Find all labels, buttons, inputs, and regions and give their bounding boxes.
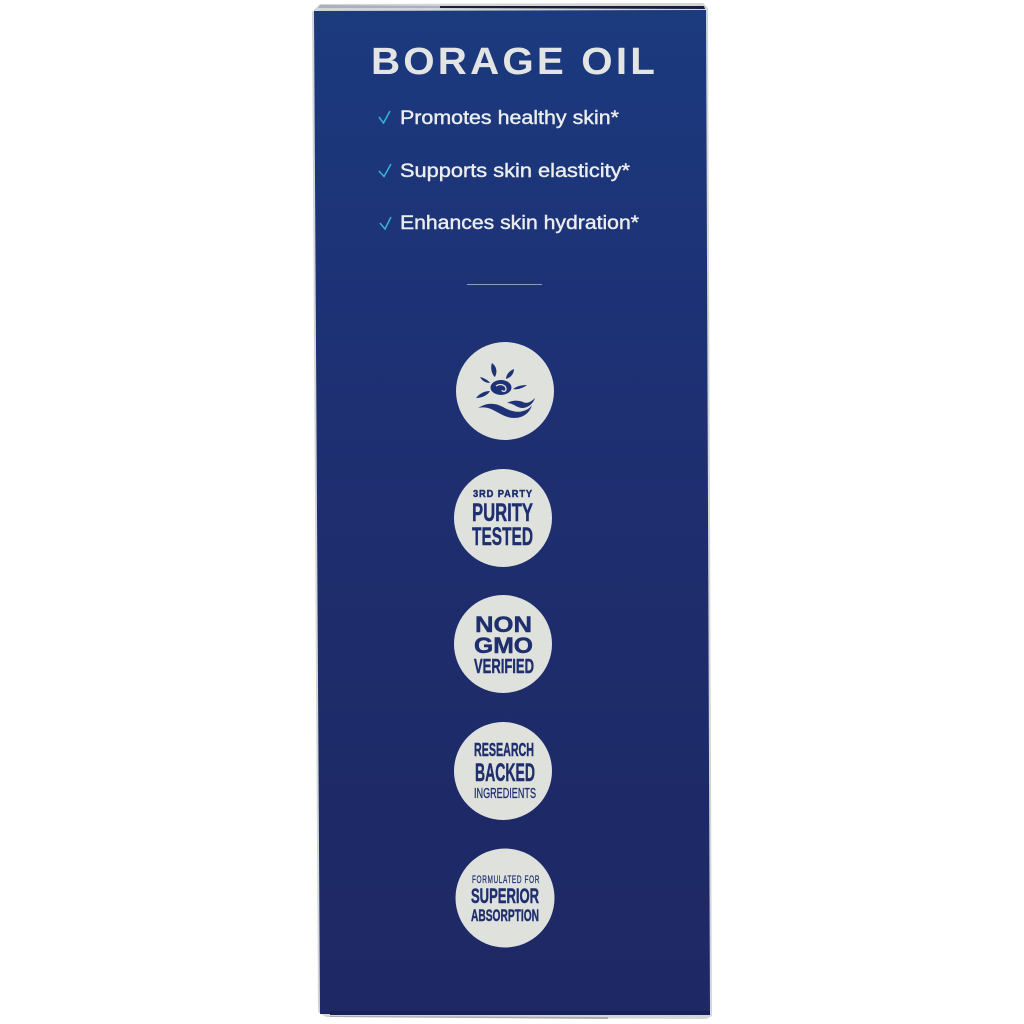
icon: sun and waves xyxy=(476,363,535,418)
benefit: hydration: Enhances skin hydration* xyxy=(400,213,640,234)
badge: non gmo verified xyxy=(454,595,552,693)
badge: research backed: BACKED xyxy=(475,759,535,787)
badge text: RESEARCH xyxy=(474,740,534,760)
badge: superior absorption: SUPERIOR xyxy=(471,885,539,908)
badge: superior absorption: ABSORPTION xyxy=(471,907,539,925)
box panel xyxy=(312,3,712,1019)
badge: research backed xyxy=(454,722,552,820)
badge: superior absorption xyxy=(456,848,554,948)
badge: purity tested: PURITY xyxy=(472,499,533,527)
badge: purity tested: TESTED xyxy=(472,523,533,551)
badge: sun and waves xyxy=(456,342,554,440)
badge: research backed: INGREDIENTS xyxy=(474,786,536,802)
badge text: FORMULATED FOR xyxy=(472,874,540,886)
badge text: 3RD PARTY xyxy=(473,488,533,500)
badge: non gmo verified: GMO xyxy=(474,633,533,658)
benefit: healthy skin: Promotes healthy skin* xyxy=(400,108,620,129)
benefits list xyxy=(379,108,640,234)
benefit: elasticity: Supports skin elasticity* xyxy=(400,161,631,182)
title: BORAGE OIL xyxy=(371,41,658,83)
badge text: NON xyxy=(475,612,532,637)
badge: non gmo verified: VERIFIED xyxy=(474,656,534,678)
badge: purity tested xyxy=(454,469,552,567)
